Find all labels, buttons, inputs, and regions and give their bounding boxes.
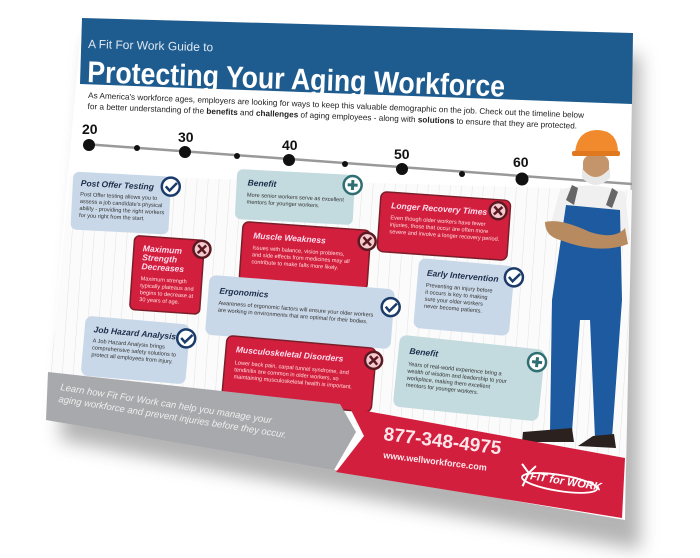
box: Maximum Strength Decreases: Strength bbox=[142, 252, 177, 265]
box: Musculoskeletal Disorders: tendinitis are common in older workers, so bbox=[234, 367, 339, 382]
box: Maximum Strength Decreases: Decreases bbox=[141, 261, 185, 274]
box: Early Intervention: Early Intervention bbox=[427, 268, 499, 284]
box: Maximum Strength Decreases: 30 years of age. bbox=[139, 297, 180, 306]
box: Early Intervention: Preventing an injury before bbox=[426, 283, 493, 295]
box: Job Hazard Analysis: Job Hazard Analysis bbox=[93, 324, 177, 342]
box: Benefit (60): mentors for younger workers. bbox=[406, 383, 479, 396]
box: Early Intervention bbox=[413, 258, 524, 337]
box: Post Offer Testing: assess a job candidate's physical bbox=[80, 199, 162, 209]
box: Benefit (60): wealth of wisdom and leadership to your bbox=[406, 369, 507, 385]
title: Protecting Your Aging Workforce bbox=[87, 56, 506, 104]
intro text: for a better understanding of the benefits and challenges of aging employees - along with solutions to ensure that they are protected. bbox=[87, 102, 577, 131]
box: Benefit (40): Benefit bbox=[247, 178, 278, 189]
timeline: 30 bbox=[178, 129, 194, 145]
grey footer band: Learn how Fit For Work can help you manage your bbox=[60, 382, 273, 427]
timeline: 50 bbox=[394, 146, 410, 162]
phone: 877-348-4975 bbox=[382, 424, 503, 459]
box: Job Hazard Analysis: comprehensive safety solutions to bbox=[92, 345, 176, 359]
box: Maximum Strength Decreases: Maximum strength bbox=[141, 276, 187, 285]
subtitle: A Fit For Work Guide to bbox=[88, 37, 214, 54]
shadow bbox=[60, 40, 640, 550]
box: Longer Recovery Times: injuries, those that occur are often more bbox=[390, 222, 488, 235]
box: Musculoskeletal Disorders: Lower back pain, carpal tunnel syndrome, and bbox=[235, 360, 349, 376]
worker figure bbox=[522, 130, 630, 448]
box: Job Hazard Analysis: A Job Hazard Analysis brings bbox=[92, 338, 165, 351]
box: Maximum Strength Decreases: begins to decrease at bbox=[140, 290, 194, 300]
box: Benefit (40) bbox=[235, 169, 362, 225]
box: Muscle Weakness: Issues with balance, vision problems, bbox=[252, 245, 345, 258]
box: Benefit (60) bbox=[393, 335, 547, 422]
box: Muscle Weakness bbox=[239, 222, 376, 291]
box: Post Offer Testing bbox=[70, 172, 180, 235]
box: Musculoskeletal Disorders: maintaining musculoskeletal health is important. bbox=[233, 374, 353, 391]
timeline: 40 bbox=[282, 137, 298, 153]
box: Muscle Weakness: Muscle Weakness bbox=[253, 230, 326, 245]
timeline: 20 bbox=[82, 121, 98, 137]
box: Musculoskeletal Disorders bbox=[222, 336, 383, 413]
box: Post Offer Testing: Post Offer Testing bbox=[81, 178, 155, 192]
box: Longer Recovery Times: severe and involve a longer recovery period. bbox=[389, 229, 500, 243]
box: Benefit (60): workplace, making them excellent bbox=[405, 375, 491, 390]
logo: FIT for WORK bbox=[529, 470, 603, 494]
box: Longer Recovery Times bbox=[377, 192, 511, 260]
box: Job Hazard Analysis bbox=[81, 316, 196, 385]
box: Ergonomics: are working in environments that are optimal for their bodies. bbox=[218, 308, 368, 325]
box: Benefit (40): mentors for younger workers. bbox=[246, 199, 320, 209]
grey footer band: aging workforce and prevent injuries before they occur. bbox=[58, 394, 287, 441]
box: Maximum Strength Decreases: typically plateaus and bbox=[140, 283, 194, 293]
box: Longer Recovery Times: Even though older workers have fewer bbox=[390, 215, 486, 228]
box: Benefit (60): Years of real-world experience bring a bbox=[408, 362, 503, 378]
box: Ergonomics: Ergonomics bbox=[219, 286, 269, 299]
grey footer band bbox=[46, 372, 356, 470]
box: Benefit (40): More senior workers serve as excellent bbox=[247, 192, 344, 204]
logo bbox=[519, 464, 604, 499]
box: Early Intervention: never become patients. bbox=[424, 304, 483, 315]
flyer page bbox=[46, 18, 633, 520]
intro text: As America's workforce ages, employers are looking for ways to keep this valuable demographic on the job. Check out the timeline below bbox=[88, 91, 584, 120]
box: Post Offer Testing: ability - providing the right workers bbox=[79, 206, 165, 216]
box: Post Offer Testing: Post Offer testing allows you to bbox=[80, 192, 157, 202]
timeline bbox=[82, 121, 632, 186]
url: www.wellworkforce.com bbox=[382, 450, 487, 473]
header band bbox=[80, 18, 633, 104]
box: Job Hazard Analysis: protect all employees from injury. bbox=[91, 352, 173, 365]
box: Muscle Weakness: contribute to make falls more likely. bbox=[251, 259, 339, 271]
box: Longer Recovery Times: Longer Recovery Times bbox=[391, 200, 488, 217]
box: Maximum Strength Decreases bbox=[130, 236, 211, 315]
box: Early Intervention: it occurs is key to making bbox=[425, 290, 488, 301]
box: Maximum Strength Decreases: Maximum bbox=[143, 243, 183, 256]
box: Musculoskeletal Disorders: Musculoskeletal Disorders bbox=[236, 344, 344, 364]
red footer band bbox=[336, 408, 625, 518]
box: Ergonomics: Awareness of ergonomic factors will ensure your older workers bbox=[218, 301, 374, 319]
box: Benefit (60): Benefit bbox=[409, 346, 440, 359]
timeline: 60 bbox=[513, 154, 529, 170]
box: Early Intervention: sure your older workers bbox=[424, 297, 483, 308]
box: Post Offer Testing: for you right from the start. bbox=[79, 213, 145, 222]
box: Muscle Weakness: and side effects from medicines may all bbox=[252, 252, 350, 265]
box: Ergonomics bbox=[205, 275, 401, 350]
